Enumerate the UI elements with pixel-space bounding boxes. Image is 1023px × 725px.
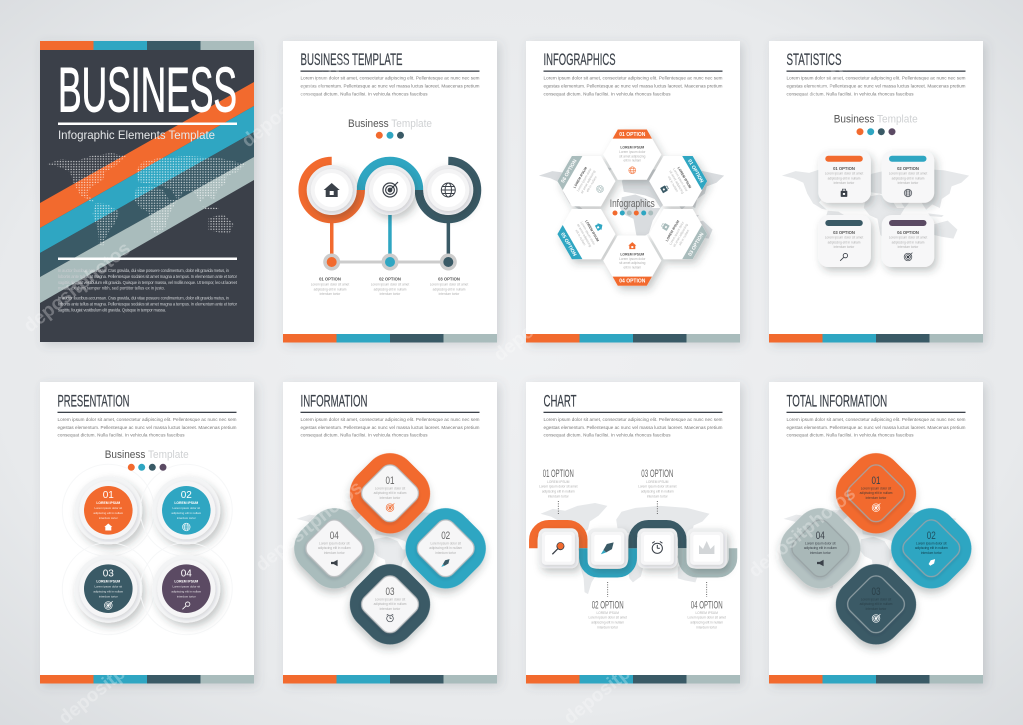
hex: upper right: elit in nullam <box>667 175 679 193</box>
hex: lower left <box>555 208 612 264</box>
colour strip <box>526 334 740 342</box>
panel: information <box>283 382 497 684</box>
option labels <box>311 276 468 296</box>
hex: bottom: elit in nullam <box>623 265 642 269</box>
circle 03: 03 <box>103 568 114 580</box>
circle 01: adipiscing elit in nullam <box>93 511 124 515</box>
intro text: Lorem ipsum dolor sit amet, consectetur adipiscing elit. Pellentesque ac nunc nec sem <box>300 76 480 80</box>
hex: top: LOREM IPSUM <box>620 146 644 150</box>
panel: business template <box>283 41 497 342</box>
heading: TOTAL INFORMATION <box>786 392 887 411</box>
intro text: consequat dictum. Nulla facilisi. In vehicula rhoncus faucibus <box>786 92 914 96</box>
hex: lower left: sit amet adipiscing <box>576 223 593 248</box>
hex: upper right: LOREM IPSUM <box>677 166 692 189</box>
hex: lower right: 03 OPTION <box>687 231 706 257</box>
world map <box>782 166 969 249</box>
option 02 label: adipiscing elit in nullam <box>591 621 624 625</box>
diamond 01 <box>339 442 441 544</box>
hex: top: 01 OPTION <box>619 132 646 138</box>
intro text: egestas elementum. Pellentesque ac nunc vel massa luctus laoreet. Maecenas pretium <box>544 84 723 88</box>
watermarks: depositphotos <box>252 477 367 576</box>
hex: lower left: LOREM IPSUM <box>584 219 600 242</box>
intro text: Lorem ipsum dolor sit amet, consectetur adipiscing elit. Pellentesque ac nunc nec sem <box>58 417 237 422</box>
circle 03: interdum tortor <box>99 594 118 598</box>
diamond 01: adipiscing elit in nullam <box>374 491 407 495</box>
diamond 01: 01 <box>872 475 880 487</box>
panel: business cover <box>40 41 254 342</box>
diamond 01: Lorem ipsum dolor sit <box>861 486 891 490</box>
watermarks: depositphotos <box>20 238 135 337</box>
hex: upper left <box>555 151 613 208</box>
option 02 label: 02 OPTION <box>592 600 624 612</box>
intro text <box>300 76 480 96</box>
world map <box>784 510 956 589</box>
circle 02: LOREM IPSUM <box>174 501 198 505</box>
heading: PRESENTATION <box>58 392 130 411</box>
cover body text <box>58 268 238 312</box>
option labels: adipiscing elit in nullam <box>314 288 347 292</box>
hex: upper right <box>652 151 710 208</box>
diamond 02: interdum tortor <box>435 551 457 555</box>
circle 02: adipiscing elit in nullam <box>171 511 202 515</box>
hub dots <box>612 210 653 216</box>
cover title: BUSINESS <box>58 56 237 126</box>
hex: bottom: Lorem ipsum dolor <box>619 257 646 261</box>
circle 04: 04 <box>181 568 192 580</box>
legend dots <box>128 464 166 471</box>
hex: bottom: sit amet adipiscing <box>619 261 646 265</box>
hex: top <box>613 130 652 174</box>
diamond 02 <box>395 497 497 599</box>
intro text: egestas elementum. Pellentesque ac nunc vel massa luctus laoreet. Maecenas pretium <box>544 425 723 430</box>
circle 01: 01 <box>103 490 114 501</box>
hex: upper right: 01 OPTION <box>686 158 705 184</box>
hex: lower right: Lorem ipsum dolor <box>668 220 686 246</box>
intro text: consequat dictum. Nulla facilisi. In vehicula rhoncus faucibus <box>544 92 671 96</box>
colour strip <box>283 334 497 342</box>
heading: INFORMATION <box>300 392 368 411</box>
heading: STATISTICS <box>786 50 842 69</box>
hex: upper left: LOREM IPSUM <box>573 166 588 189</box>
heading rule <box>544 70 722 72</box>
circle 04: LOREM IPSUM <box>174 580 198 584</box>
intro text <box>58 417 237 438</box>
diamond 02: interdum tortor <box>921 551 943 555</box>
colour strip <box>526 675 740 684</box>
diamond 02: Lorem ipsum dolor sit <box>916 542 947 546</box>
diamond 04: Lorem ipsum dolor sit <box>319 542 350 546</box>
hex: upper right: Lorem ipsum dolor <box>672 167 689 193</box>
option 03 label: 03 OPTION <box>641 468 673 480</box>
option labels: interdum tortor <box>320 292 341 296</box>
hex: lower right: LOREM IPSUM <box>665 219 680 242</box>
diamond 01: interdum tortor <box>380 496 401 500</box>
intro text: consequat dictum. Nulla facilisi. In vehicula rhoncus faucibus <box>58 432 185 438</box>
diamond 03: 03 <box>386 586 394 598</box>
intro text: egestas elementum. Pellentesque ac nunc vel massa luctus laoreet. Maecenas pretium <box>786 84 966 88</box>
heading rule <box>300 412 480 413</box>
colour strip <box>283 675 497 684</box>
disc: home <box>307 165 357 215</box>
circle 01: LOREM IPSUM <box>96 501 120 505</box>
circle 01: interdum tortor <box>99 516 118 520</box>
heading rule <box>786 412 966 413</box>
intro text <box>786 76 966 96</box>
diagonal stripes <box>40 82 254 303</box>
legend dots <box>856 128 896 135</box>
intro text: egestas elementum. Pellentesque ac nunc vel massa luctus laoreet. Maecenas pretium <box>300 425 480 430</box>
watermarks: depositphotos <box>745 483 860 582</box>
chart title: Business Template <box>105 449 189 461</box>
option 03 label: interdum tortor <box>647 494 669 498</box>
watermarks: depositphotos <box>490 267 605 366</box>
option labels: Lorem ipsum dolor sit amet <box>371 282 409 286</box>
intro text: egestas elementum. Pellentesque ac nunc vel massa luctus laoreet. Maecenas pretium <box>58 425 237 430</box>
option 02 label: Lorem ipsum dolor sit amet <box>588 616 627 620</box>
heading: CHART <box>544 392 576 411</box>
intro text <box>786 417 966 438</box>
panel: presentation <box>40 382 254 684</box>
option 03 label: Lorem ipsum dolor sit amet <box>638 484 677 488</box>
diamond 03 <box>339 553 441 655</box>
circle 04: interdum tortor <box>177 594 196 598</box>
option 02 label <box>588 582 627 629</box>
tile: clock <box>637 528 677 568</box>
intro text: Lorem ipsum dolor sit amet, consectetur adipiscing elit. Pellentesque ac nunc nec sem <box>786 76 966 80</box>
hex: top: Lorem ipsum dolor <box>619 150 646 154</box>
diamond 04 <box>769 497 871 599</box>
diamond 02: adipiscing elit in nullam <box>915 546 948 550</box>
card 04: adipiscing elit in nullam <box>892 240 925 244</box>
disc: globe <box>423 165 473 215</box>
card 03: interdum tortor <box>834 245 855 249</box>
legend dots <box>376 132 404 139</box>
hex: bottom <box>613 242 652 286</box>
world map <box>539 166 724 249</box>
circle 03: Lorem ipsum dolor sit <box>94 584 122 588</box>
hex: top: elit in nullam <box>623 159 642 163</box>
option 01 label: LOREM IPSUM <box>547 480 570 484</box>
colour strip <box>769 334 983 342</box>
hex: bottom: LOREM IPSUM <box>620 253 644 257</box>
diamond 04: interdum tortor <box>324 551 346 555</box>
intro text: consequat dictum. Nulla facilisi. In vehicula rhoncus faucibus <box>300 432 428 438</box>
intro text: consequat dictum. Nulla facilisi. In vehicula rhoncus faucibus <box>300 92 428 96</box>
cover body text: lobortis ante tellus at magna. Pellentesque sodales sit amet magna a tempus. In elementum ante et tortor <box>58 302 238 306</box>
hex: upper right: sit amet adipiscing <box>668 170 685 195</box>
circle 01 <box>62 464 154 556</box>
hex: upper left: 06 OPTION <box>560 158 579 184</box>
stems and nodes <box>323 210 457 270</box>
card 04: interdum tortor <box>898 245 919 249</box>
cover lower rule <box>58 258 237 260</box>
cover rule <box>58 122 237 125</box>
diamond 01: Lorem ipsum dolor sit <box>375 486 405 490</box>
hex: lower left: elit in nullam <box>574 229 587 246</box>
option 01 label: interdum tortor <box>548 494 570 498</box>
diamond 03: interdum tortor <box>380 607 401 611</box>
option 04 label: LOREM IPSUM <box>696 611 718 615</box>
intro text <box>544 417 723 438</box>
tile: rocket <box>588 528 628 568</box>
wave track <box>533 524 733 573</box>
card 03: adipiscing elit in nullam <box>828 240 861 244</box>
hub title: Infographics <box>610 198 655 210</box>
circle 03 <box>62 543 154 635</box>
card 01 <box>818 151 871 203</box>
chart title: Business Template <box>348 118 432 130</box>
diamond 02: 02 <box>441 530 450 542</box>
diamond 04 <box>283 497 385 599</box>
hexagon bodies <box>557 130 707 286</box>
circle 03: adipiscing elit in nullam <box>93 590 124 594</box>
heading rule <box>544 412 722 413</box>
option labels: 01 OPTION <box>319 276 341 282</box>
card 01: interdum tortor <box>834 181 855 185</box>
card 02: Lorem ipsum dolor sit amet <box>889 172 927 176</box>
card 04 <box>882 215 934 267</box>
option 01 label: Lorem ipsum dolor sit amet <box>539 484 578 488</box>
card 01: 01 OPTION <box>833 166 855 171</box>
colour strip <box>40 675 254 684</box>
diamond 03: 03 <box>872 586 880 598</box>
circle 04 <box>140 543 232 635</box>
card 03: Lorem ipsum dolor sit amet <box>825 236 863 240</box>
dotted world map <box>47 153 246 246</box>
option 01 label: adipiscing elit in nullam <box>542 489 575 493</box>
card 04: Lorem ipsum dolor sit amet <box>889 236 927 240</box>
hex: bottom: 04 OPTION <box>619 279 646 285</box>
circle 04: Lorem ipsum dolor sit <box>172 584 200 588</box>
panel: statistics <box>769 41 983 342</box>
option labels: Lorem ipsum dolor sit amet <box>430 282 468 286</box>
diamond 03: Lorem ipsum dolor sit <box>375 598 405 602</box>
intro text <box>544 76 723 96</box>
option 03 label <box>638 468 677 515</box>
diamond 04: adipiscing elit in nullam <box>318 546 351 550</box>
diamond 03: interdum tortor <box>866 607 887 611</box>
heading: INFOGRAPHICS <box>544 50 616 69</box>
hex: upper left: sit amet adipiscing <box>580 169 596 194</box>
heading rule <box>300 70 480 72</box>
intro text: consequat dictum. Nulla facilisi. In vehicula rhoncus faucibus <box>544 432 671 438</box>
diamond 03: Lorem ipsum dolor sit <box>861 598 891 602</box>
option 03 label: LOREM IPSUM <box>646 480 669 484</box>
circle 02 <box>140 464 232 556</box>
diamond 03: adipiscing elit in nullam <box>374 602 407 606</box>
diamond 02: adipiscing elit in nullam <box>429 546 462 550</box>
disc: target <box>365 165 415 215</box>
diamond 02: 02 <box>927 530 936 542</box>
option 01 label: 01 OPTION <box>543 468 574 480</box>
hex: lower left: Lorem ipsum dolor <box>580 221 597 246</box>
diamond 02: Lorem ipsum dolor sit <box>430 542 461 546</box>
intro text: consequat dictum. Nulla facilisi. In vehicula rhoncus faucibus <box>786 432 914 438</box>
world map <box>541 503 709 594</box>
panel: chart <box>526 382 740 684</box>
diamond 04: adipiscing elit in nullam <box>804 546 837 550</box>
option 04 label <box>687 582 726 629</box>
option labels: 03 OPTION <box>438 276 460 282</box>
panel: infographics <box>526 41 740 342</box>
option 03 label: adipiscing elit in nullam <box>641 489 674 493</box>
bottom connector <box>332 260 448 264</box>
card 03: 03 OPTION <box>833 230 855 235</box>
intro text: egestas elementum. Pellentesque ac nunc vel massa luctus laoreet. Maecenas pretium <box>786 425 966 430</box>
card 02: 02 OPTION <box>897 166 919 171</box>
card 02: adipiscing elit in nullam <box>892 176 925 180</box>
circle 02: 02 <box>181 490 192 501</box>
option labels: 02 OPTION <box>379 276 401 282</box>
cover subtitle: Infographic Elements Template <box>58 128 215 142</box>
hex: lower right: elit in nullam <box>678 229 690 246</box>
heading: BUSINESS TEMPLATE <box>300 50 402 69</box>
heading rule <box>786 70 966 72</box>
tile: search <box>538 528 578 568</box>
option 04 label: 04 OPTION <box>691 600 723 612</box>
circle 02: Lorem ipsum dolor sit <box>172 506 200 510</box>
card 01: Lorem ipsum dolor sit amet <box>825 172 863 176</box>
chart title: Business Template <box>834 114 918 126</box>
cover body text: In auctor faucibus accumsan. Cras gravida, dui vitae posuere condimentum, dolor elit gravida metus, in <box>58 296 230 300</box>
option 01 label <box>539 468 578 515</box>
cover body text: In auctor faucibus accumsan. Cras gravida, dui vitae posuere condimentum, dolor elit gravida metus, in <box>58 268 230 273</box>
card 02 <box>882 151 934 203</box>
card 01: adipiscing elit in nullam <box>828 176 861 180</box>
diamond 03 <box>825 553 927 655</box>
cover colour strip <box>40 41 254 50</box>
hex: top: sit amet adipiscing <box>619 154 646 158</box>
cover body text: sagittis, feugiat vestibulum elit gravida. Quisque in tempor massa. <box>58 308 166 312</box>
diamond 04: Lorem ipsum dolor sit <box>805 542 836 546</box>
watermarks <box>20 35 880 725</box>
watermarks: depositphotos <box>238 53 353 152</box>
diamond 02 <box>880 497 982 599</box>
circle 04: adipiscing elit in nullam <box>171 590 202 594</box>
hex: lower right <box>652 208 710 264</box>
heading rule <box>58 412 236 413</box>
circle 03: LOREM IPSUM <box>96 580 120 584</box>
option labels: Lorem ipsum dolor sit amet <box>311 282 349 286</box>
diamond 01: interdum tortor <box>866 496 887 500</box>
intro text <box>300 417 480 438</box>
intro text: Lorem ipsum dolor sit amet, consectetur adipiscing elit. Pellentesque ac nunc nec sem <box>544 417 723 422</box>
option 02 label: interdum tortor <box>597 625 619 629</box>
circle 01: Lorem ipsum dolor sit <box>94 506 122 510</box>
diamond 01 <box>825 442 927 544</box>
diamond 01: 01 <box>386 475 394 487</box>
colour strip <box>769 675 983 684</box>
intro text: Lorem ipsum dolor sit amet, consectetur adipiscing elit. Pellentesque ac nunc nec sem <box>300 417 480 422</box>
option 04 label: Lorem ipsum dolor sit amet <box>687 616 726 620</box>
option 02 label: LOREM IPSUM <box>597 611 619 615</box>
hex: lower left: 05 OPTION <box>559 232 578 258</box>
cover body text: sagittis, feugiat vestibulum elit gravida. Quisque in tempor massa, vel mollis neque. Ut tempor, leo ut laoreet <box>58 280 238 285</box>
circle 02: interdum tortor <box>177 516 196 520</box>
option 04 label: interdum tortor <box>696 625 718 629</box>
card 03 <box>818 215 871 267</box>
card 02: interdum tortor <box>898 181 919 185</box>
card 04: 04 OPTION <box>897 230 919 235</box>
hex: lower right: sit amet adipiscing <box>672 223 689 248</box>
panel: total information <box>769 382 983 684</box>
option labels: adipiscing elit in nullam <box>433 288 466 292</box>
intro text: Lorem ipsum dolor sit amet, consectetur adipiscing elit. Pellentesque ac nunc nec sem <box>544 76 723 80</box>
world map <box>297 510 469 589</box>
intro text: Lorem ipsum dolor sit amet, consectetur adipiscing elit. Pellentesque ac nunc nec sem <box>786 417 966 422</box>
diamond 03: adipiscing elit in nullam <box>860 602 893 606</box>
watermarks: depositphotos <box>765 35 880 134</box>
diamond 04: 04 <box>330 530 339 542</box>
option 04 label: adipiscing elit in nullam <box>690 621 723 625</box>
cover body text: lobortis ante tellus at magna. Pellentesque sodales sit amet magna a tempus. In elementum ante et tortor <box>58 274 238 279</box>
option labels: interdum tortor <box>380 292 401 296</box>
cover body text: mattis, ex diam semper nibh, sed porttitor tellus ex in justo. <box>58 286 165 290</box>
tile: crown <box>687 528 727 568</box>
hex: upper left: Lorem ipsum dolor <box>576 167 593 192</box>
diamond 04: 04 <box>816 530 825 542</box>
hex: upper left: elit in nullam <box>585 175 598 193</box>
diamond 04: interdum tortor <box>810 551 832 555</box>
option labels: adipiscing elit in nullam <box>374 288 407 292</box>
intro text: egestas elementum. Pellentesque ac nunc vel massa luctus laoreet. Maecenas pretium <box>300 84 480 88</box>
wave arcs <box>303 161 477 219</box>
diamond 01: adipiscing elit in nullam <box>860 491 893 495</box>
option labels: interdum tortor <box>439 292 460 296</box>
